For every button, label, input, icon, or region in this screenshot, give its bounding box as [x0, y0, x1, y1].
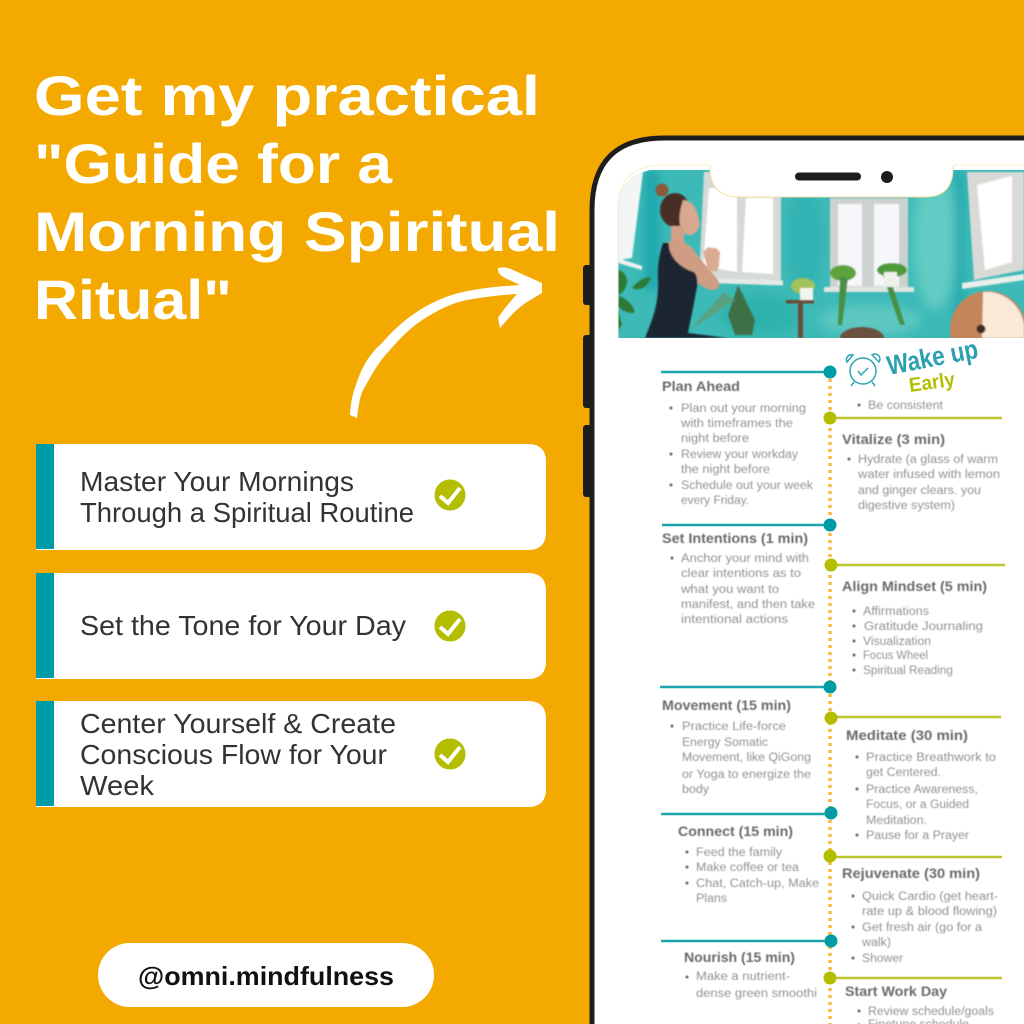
section: nourish: Nourish (15 min)	[684, 949, 795, 965]
section: rejuvenate: walk)	[861, 937, 891, 949]
title: Ritual"	[34, 268, 232, 331]
green timeline rails	[824, 412, 1005, 984]
benefit card 1	[36, 444, 546, 550]
section: plan ahead: the night before	[681, 464, 770, 476]
section: plan ahead: every Friday.	[681, 495, 749, 507]
section: plan ahead: Review your workday	[681, 449, 798, 461]
title: Morning Spiritual	[34, 200, 560, 263]
title: Get my practical	[34, 64, 540, 127]
section: meditate: Meditate (30 min)	[846, 727, 968, 743]
dotted timeline spine	[828, 372, 832, 1024]
section: rejuvenate: Shower	[862, 953, 903, 965]
section: movement: body	[682, 784, 709, 796]
benefit card 1: Master Your Mornings	[80, 466, 354, 497]
section: align mindset: Align Mindset (5 min)	[842, 578, 987, 594]
benefit card 2: Set the Tone for Your Day	[80, 610, 406, 641]
section: plan ahead: Schedule out your week	[681, 480, 813, 492]
section: plan ahead: Plan Ahead	[662, 378, 740, 394]
title	[34, 64, 560, 331]
wake up heading: Wake up	[884, 334, 980, 381]
woman	[656, 184, 668, 196]
section: rejuvenate: rate up & blood flowing)	[862, 906, 997, 918]
section: set intentions	[662, 530, 815, 626]
section: rejuvenate: Quick Cardio (get heart-	[862, 891, 998, 903]
section: connect: Connect (15 min)	[678, 823, 793, 839]
section: plan ahead	[662, 378, 813, 507]
section: set intentions: what you want to	[680, 584, 779, 596]
wake up heading: Early	[908, 369, 957, 397]
section: plan ahead: with timeframes the	[680, 418, 793, 430]
benefit card 3: Conscious Flow for Your	[80, 739, 387, 770]
arrow pointing to phone	[350, 267, 542, 418]
section: wake up bullet	[856, 400, 944, 410]
section: align mindset: Affirmations	[863, 606, 929, 618]
icon: check	[434, 480, 466, 510]
icon: check	[434, 738, 466, 770]
benefit card 1: Through a Spiritual Routine	[80, 497, 414, 528]
title: "Guide for a	[34, 132, 393, 195]
section: meditate: Practice Breathwork to	[866, 752, 996, 764]
phone mockup	[583, 138, 1024, 1024]
timeline document	[660, 334, 1005, 1024]
section: set intentions: manifest, and then take	[681, 599, 815, 611]
centre-left window	[699, 172, 781, 285]
section: movement: Movement (15 min)	[662, 697, 791, 713]
speaker	[795, 172, 861, 180]
section: connect: Plans	[696, 893, 727, 905]
round basket mirror	[949, 290, 1024, 338]
phone body	[592, 138, 1024, 1024]
section: movement: Energy Somatic	[682, 737, 768, 749]
wake up heading	[886, 344, 978, 392]
handle pill: @omni.mindfulness	[138, 961, 394, 991]
section: meditate	[846, 727, 996, 842]
section: set intentions: intentional actions	[681, 614, 788, 626]
icon: alarm clock	[846, 354, 880, 386]
section: vitalize	[842, 431, 1000, 512]
section: connect: Feed the family	[696, 847, 782, 859]
benefit card 3: Center Yourself & Create	[80, 708, 396, 739]
section: plan ahead: Plan out your morning	[681, 403, 806, 415]
screen photo: woman meditating in teal room	[618, 170, 1024, 338]
section: movement	[662, 697, 811, 796]
section: plan ahead: night before	[681, 433, 749, 445]
section: set intentions: clear intentions as to	[681, 568, 801, 580]
section: meditate: Meditation.	[866, 815, 927, 827]
teal timeline rails	[660, 366, 838, 948]
section: vitalize: Hydrate (a glass of warm	[858, 454, 998, 466]
section: vitalize: digestive system)	[858, 500, 955, 512]
section: meditate: get Centered.	[866, 767, 941, 779]
section: wake up bullet: Be consistent	[868, 400, 944, 412]
section: meditate: Practice Awareness,	[866, 784, 978, 796]
section: movement: Movement, like QiGong	[682, 752, 811, 764]
camera	[881, 171, 893, 183]
centre window	[830, 198, 908, 288]
section: meditate: Focus, or a Guided	[866, 799, 969, 811]
screen outline	[618, 165, 1024, 338]
section: vitalize: water infused with lemon	[857, 469, 1000, 481]
benefit card 2	[36, 573, 546, 679]
section: start work day: Start Work Day	[845, 983, 947, 999]
section: align mindset	[842, 578, 987, 677]
notch	[700, 160, 962, 197]
section: rejuvenate: Rejuvenate (30 min)	[842, 865, 980, 881]
section: nourish: Make a nutrient-	[696, 971, 790, 983]
icon: check	[434, 610, 466, 642]
section: connect: Make coffee or tea	[696, 862, 800, 874]
section: connect: Chat, Catch-up, Make	[696, 878, 819, 890]
section: nourish: dense green smoothi	[696, 988, 817, 1000]
section: connect	[678, 823, 819, 905]
section: set intentions: Set Intentions (1 min)	[662, 530, 808, 546]
right column text	[842, 400, 1000, 1024]
benefit card 3	[36, 701, 546, 807]
phone side buttons	[583, 265, 593, 497]
benefit card 3: Week	[80, 770, 155, 801]
section: nourish	[684, 949, 817, 1000]
plants	[618, 263, 907, 335]
section: align mindset: Focus Wheel	[863, 650, 928, 662]
section: movement: Practice Life-force	[682, 721, 786, 733]
left window	[618, 172, 643, 260]
section: align mindset: Gratitude Journaling	[864, 621, 983, 633]
section: vitalize: Vitalize (3 min)	[842, 431, 945, 447]
section: start work day: Review schedule/goals	[868, 1006, 994, 1018]
right window	[967, 172, 1024, 280]
section: rejuvenate	[842, 865, 998, 965]
section: meditate: Pause for a Prayer	[866, 830, 969, 842]
section: start work day	[845, 983, 994, 1024]
section: rejuvenate: Get fresh air (go for a	[862, 922, 983, 934]
section: vitalize: and ginger clears. you	[858, 485, 981, 497]
section: align mindset: Visualization	[863, 636, 931, 648]
section: align mindset: Spiritual Reading	[863, 665, 953, 677]
handle pill	[98, 943, 434, 1007]
left column text	[662, 378, 819, 1000]
section: movement: or Yoga to energize the	[682, 769, 811, 781]
section: set intentions: Anchor your mind with	[681, 553, 809, 565]
